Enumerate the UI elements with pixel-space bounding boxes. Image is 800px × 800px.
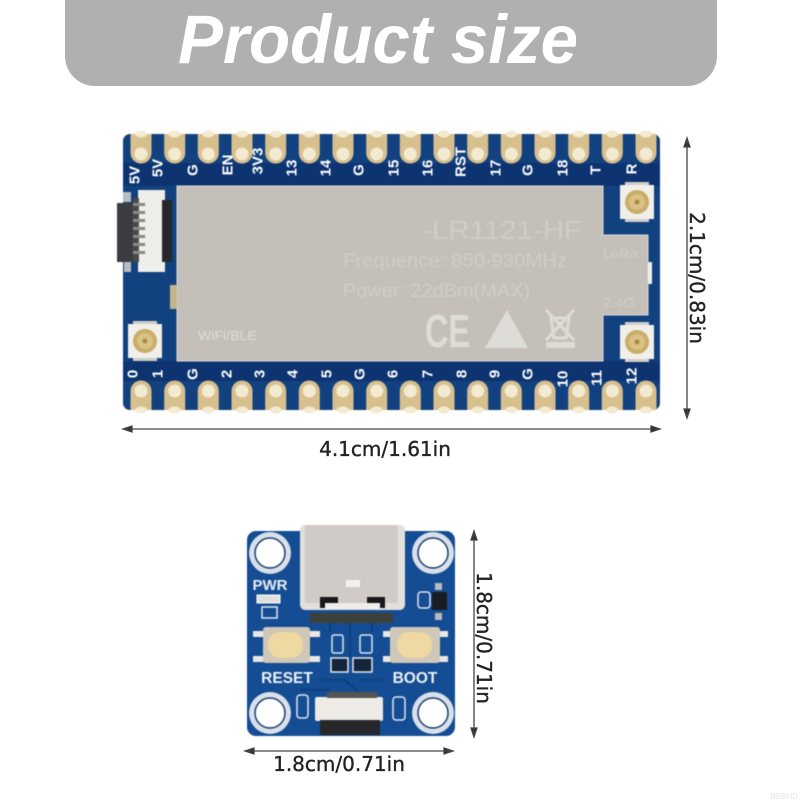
reset label: RESET [261,670,313,687]
width dimension arrow [123,426,660,432]
bottom pin labels: 9 [486,370,504,378]
bottom pin labels: 7 [420,370,436,378]
boot label: BOOT [393,670,438,687]
top pin labels [126,147,640,184]
bottom pin labels [124,368,640,387]
pcb traces [300,623,385,692]
shield printed text: Power: 22dBm(MAX) [343,281,530,302]
bottom pads [130,380,656,414]
bottom pin labels: G [184,368,202,380]
bottom pin labels: 5 [318,370,336,378]
mounting holes [249,532,454,734]
small board: usb adapter [247,525,455,736]
top pin labels: RST [452,147,470,177]
top pin labels: 18 [554,160,572,176]
small antenna connector left [128,321,162,361]
top pin labels: 14 [318,159,334,176]
top pin labels: 5V [150,159,166,177]
shield printed text: Frequence: 850-930MHz [343,251,567,272]
bottom pin labels: 4 [284,369,302,378]
small board height label: 1.8cm/0.71in [472,572,496,704]
bottom pin labels: 12 [624,368,640,384]
bottom pin labels: 0 [124,370,142,378]
bottom fpc connector [315,692,383,735]
board pcb [123,134,660,410]
pcb [247,531,455,736]
top pin labels: EN [220,155,236,175]
small board width label: 1.8cm/0.71in [273,752,405,776]
top pin labels: R [624,163,640,174]
bottom pin labels: 11 [588,370,606,386]
shield printed text [198,215,639,357]
main board: LR1121 module [117,130,660,414]
bottom pin labels: G [352,368,368,380]
top pin labels: G [520,164,536,176]
width label: 4.1cm/1.61in [319,437,451,461]
antenna connector top right [620,182,654,222]
pwr label: PWR [252,577,288,594]
top pin labels: 13 [284,160,300,176]
shield printed text: LoRa [603,246,639,261]
shield printed text: WiFi/BLE [198,328,257,343]
small board height arrow [471,531,477,737]
height dimension arrow [684,138,690,418]
bottom pin labels: 6 [384,370,402,378]
title banner [65,0,717,86]
metal shield [170,186,652,361]
bottom pin labels: G [520,368,536,380]
top pin labels: T [588,165,604,175]
pwr led [257,595,280,618]
top pin labels: 17 [488,160,504,176]
top pin labels: 15 [386,160,402,176]
bottom pin labels: 1 [150,370,166,378]
reset button [253,627,320,663]
top pin labels: G [184,164,202,176]
weee bin mark [546,310,574,340]
bottom pin labels: 3 [252,370,268,378]
bottom pin labels: 2 [218,370,236,378]
top pin labels: 3V3 [250,148,266,174]
height label: 2.1cm/0.83in [685,212,709,344]
title banner: Product size [178,1,578,78]
center smd parts [331,635,372,672]
top pin labels: 16 [420,160,436,176]
shield printed text: -LR1121-HF [422,215,582,245]
bottom pin labels: 8 [454,370,470,378]
ic top right [418,583,447,620]
esd triangle mark [485,310,528,348]
fpc connector [117,190,172,272]
usb-c connector [300,525,405,623]
shield printed text: 2.4G [603,295,635,310]
top pin labels: 5V [126,166,144,184]
top pin labels: G [350,164,368,176]
shield printed text: CE [425,305,470,357]
small board width arrow [245,748,453,754]
weee bar [546,342,575,348]
boot button [383,627,448,663]
antenna connector bottom right [620,322,654,362]
bottom side parts [297,695,405,720]
bottom pin labels: 10 [554,371,572,387]
top pads [130,130,656,164]
